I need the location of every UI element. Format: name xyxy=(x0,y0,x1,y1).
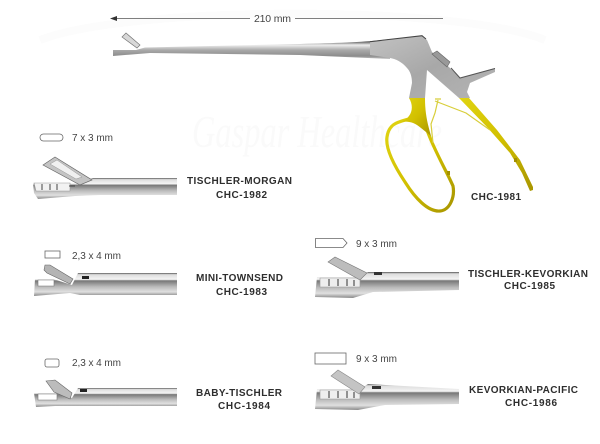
item: Tischler-Kevorkian: TISCHLER-KEVORKIAN xyxy=(468,269,588,280)
item: Kevorkian-Pacific: 9 x 3 mm xyxy=(356,354,397,365)
model label: CHC-1981 xyxy=(471,192,521,203)
forceps head xyxy=(34,388,177,407)
main instrument: CHC-1981 forceps xyxy=(113,33,533,211)
item: Tischler-Kevorkian: 9 x 3 mm xyxy=(356,239,397,250)
forceps head xyxy=(315,272,459,298)
jaw shape icon xyxy=(40,134,63,141)
dimension arrow: 210 mm xyxy=(110,13,443,25)
gold finger ring xyxy=(387,118,453,211)
jaw shape icon xyxy=(316,238,347,248)
background watermark: Gaspar Healthcare xyxy=(192,106,442,157)
shaft xyxy=(113,39,390,59)
item: Baby-Tischler: BABY-TISCHLER xyxy=(196,388,283,399)
item: Mini-Townsend: MINI-TOWNSEND xyxy=(196,273,283,284)
jaw tip xyxy=(122,33,140,48)
item: Tischler-Morgan: CHC-1982 xyxy=(216,190,267,201)
item: Baby-Tischler: CHC-1984 xyxy=(218,401,270,412)
jaw shape icon xyxy=(45,251,60,258)
item: Baby-Tischler xyxy=(34,358,283,412)
dimension arrow: 210 mm: 210 mm xyxy=(254,13,291,25)
body and stem xyxy=(370,36,495,98)
background watermark xyxy=(40,14,545,157)
item: Baby-Tischler: 2,3 x 4 mm xyxy=(72,358,121,369)
item: Kevorkian-Pacific: CHC-1986 xyxy=(505,398,557,409)
item: Tischler-Morgan: TISCHLER-MORGAN xyxy=(187,176,292,187)
thumb screw xyxy=(432,51,450,67)
item: Tischler-Morgan xyxy=(33,133,292,201)
springs xyxy=(431,99,490,143)
item: Tischler-Kevorkian: CHC-1985 xyxy=(504,281,555,292)
forceps head xyxy=(33,178,177,199)
item: Tischler-Morgan: 7 x 3 mm xyxy=(72,133,113,144)
item: Tischler-Kevorkian xyxy=(315,238,588,298)
item: Kevorkian-Pacific xyxy=(315,353,578,410)
forceps head xyxy=(34,273,177,296)
item: Mini-Townsend xyxy=(34,251,283,298)
jaw shape icon xyxy=(315,353,346,364)
item: Kevorkian-Pacific: KEVORKIAN-PACIFIC xyxy=(469,385,578,396)
item: Mini-Townsend: CHC-1983 xyxy=(216,287,267,298)
forceps head xyxy=(315,384,459,410)
gold lever xyxy=(459,98,533,191)
item: Mini-Townsend: 2,3 x 4 mm xyxy=(72,251,121,262)
jaw shape icon xyxy=(45,359,59,367)
